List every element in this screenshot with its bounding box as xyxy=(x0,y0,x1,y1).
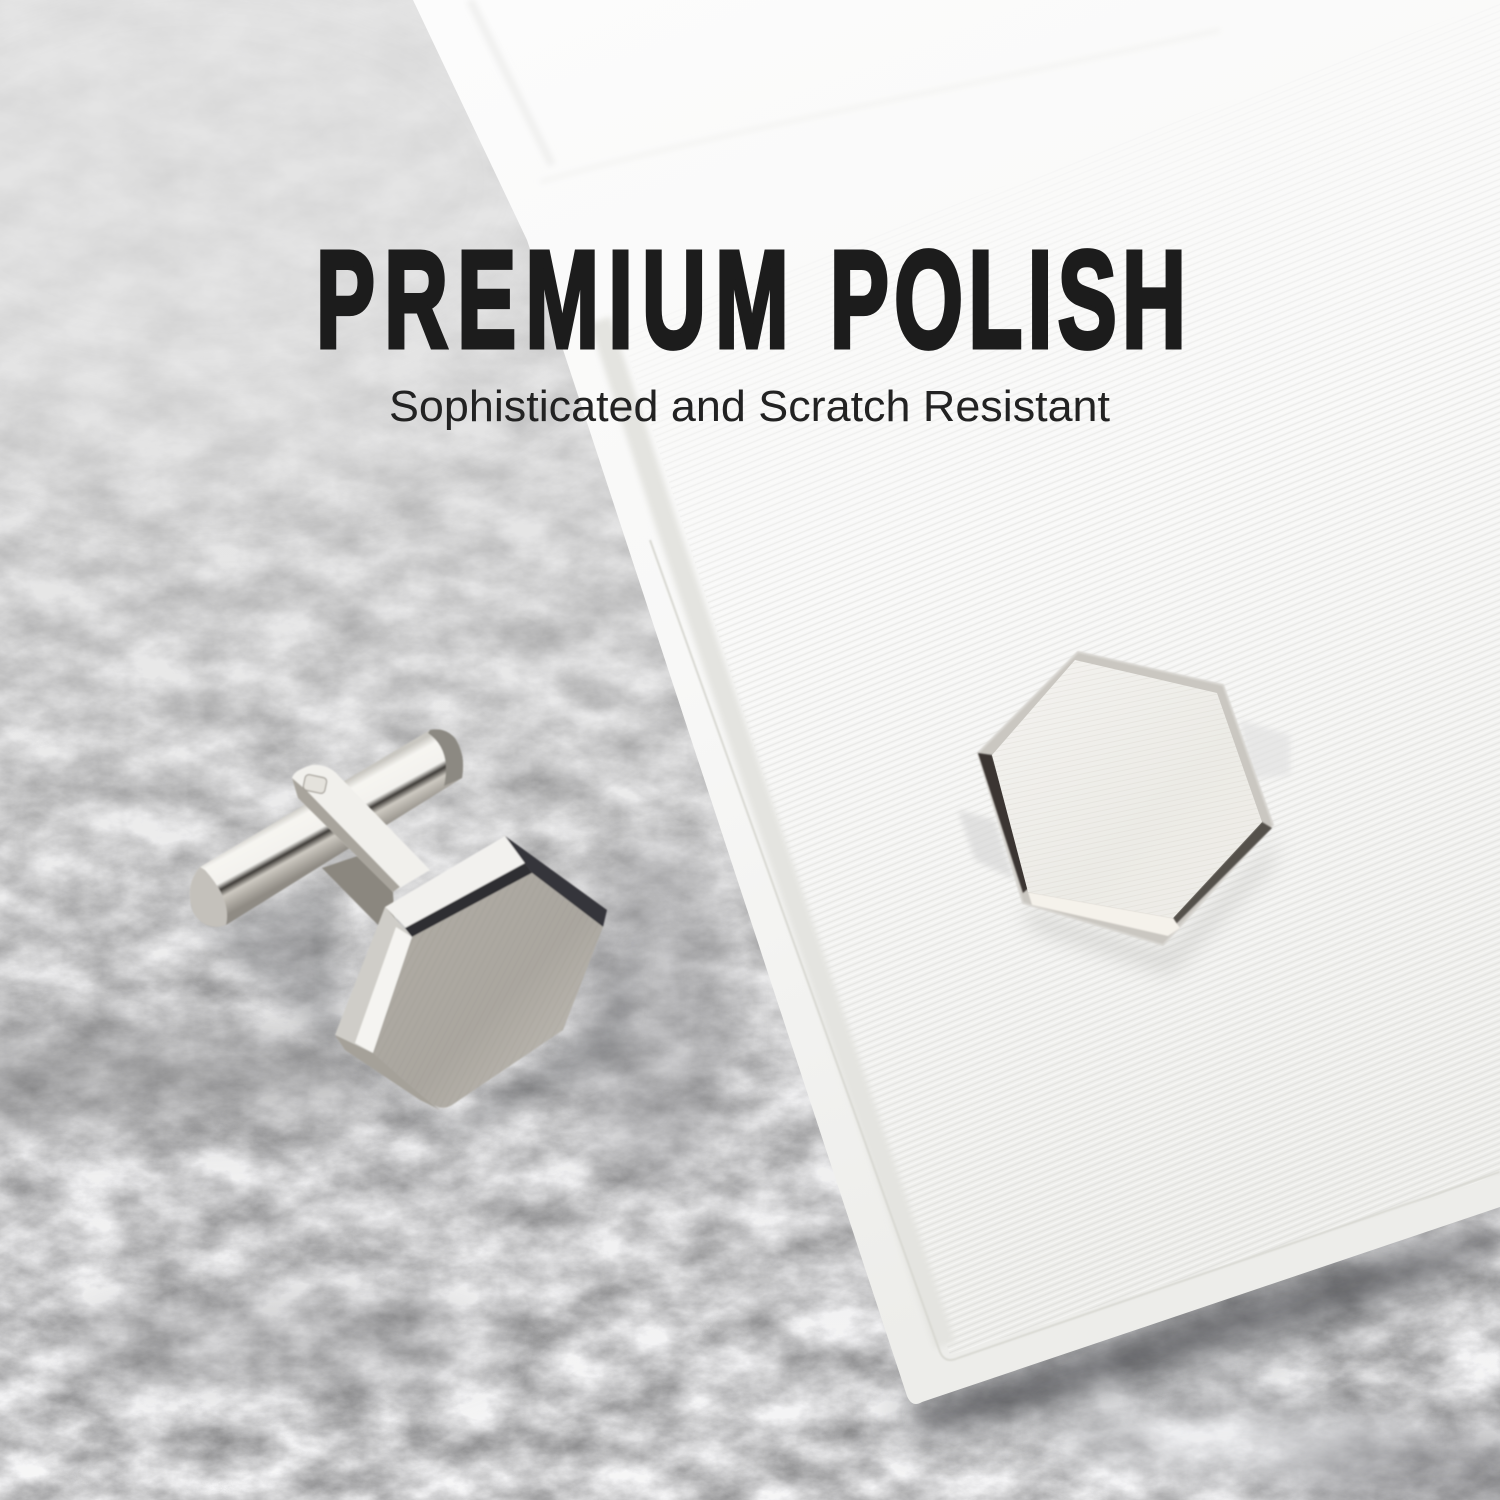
right dark bevel xyxy=(505,836,607,927)
connecting post base xyxy=(322,845,395,925)
top bright bevel xyxy=(385,836,533,932)
title: POLISH xyxy=(830,222,1191,377)
stitched left seam band xyxy=(600,320,945,1345)
hexagonal face xyxy=(335,836,607,1110)
swivel arm xyxy=(292,765,430,892)
brushed face xyxy=(373,873,603,1108)
brushed face xyxy=(992,660,1262,918)
toggle bar xyxy=(190,729,463,927)
subtitle: Sophisticated and Scratch Resistant xyxy=(389,382,1110,431)
top dark bevel strip xyxy=(405,863,532,937)
shirt cuff xyxy=(413,0,1500,1404)
soft shadow xyxy=(1023,835,1280,975)
outer hexagon rim xyxy=(978,652,1273,945)
stitch line xyxy=(650,540,1500,1360)
cufflink shadow xyxy=(195,880,640,1140)
dark left bevel xyxy=(978,753,1032,893)
dark lower-right bevel xyxy=(1173,822,1272,925)
outer reflective bevel xyxy=(335,907,412,1053)
bottom-left edge xyxy=(335,1035,440,1110)
title: PREMIUM xyxy=(316,222,798,377)
upper fold crease xyxy=(540,30,1220,182)
thread marks left xyxy=(958,810,1015,880)
left cufflink xyxy=(190,729,640,1140)
bright bottom bevel xyxy=(1028,892,1180,936)
light left bevel xyxy=(355,927,412,1053)
left fold highlight xyxy=(470,0,552,165)
cuff fabric body xyxy=(413,0,1500,1404)
right cufflink xyxy=(958,652,1290,975)
cuff twill weave xyxy=(662,134,1500,1353)
shadow under shirt cuff xyxy=(912,1222,1500,1435)
thread marks xyxy=(1240,720,1290,780)
